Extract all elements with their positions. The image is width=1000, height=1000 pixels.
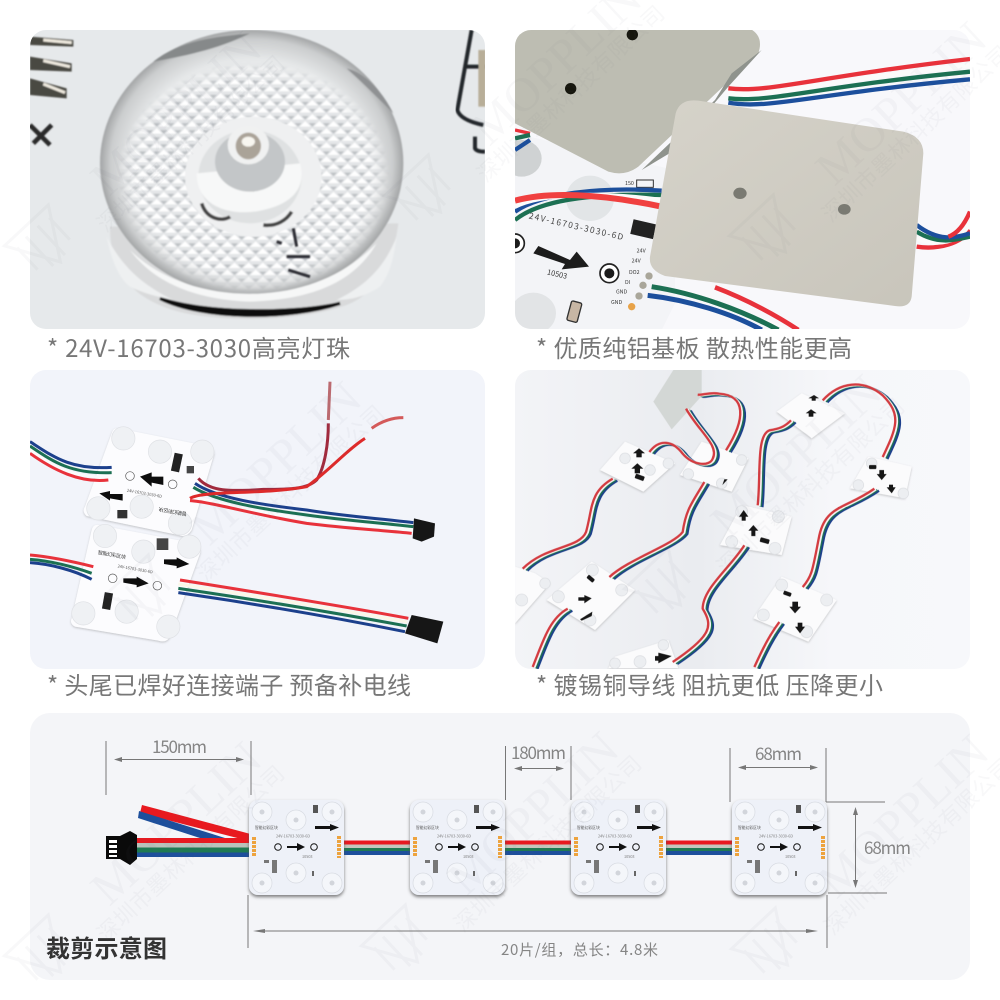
circuit board under the plates: DO2 xyxy=(629,268,640,276)
rear wires xyxy=(515,59,970,248)
circuit board under the plates: DI xyxy=(625,278,631,286)
module 1 xyxy=(249,800,344,895)
module 4: 智能幻彩区块 xyxy=(738,825,761,831)
tri-colour wires xyxy=(523,385,900,669)
lens body xyxy=(99,30,404,319)
module 4 xyxy=(732,800,827,895)
watermark: repeating brand mark: 深圳市墨林科技有限公司 xyxy=(189,397,391,588)
dimension: 68mm width xyxy=(730,740,826,802)
circuit board under the plates: 24V-16703-3030-6D xyxy=(528,210,625,243)
panel: LED lens close-up photo xyxy=(30,30,486,330)
wires: lower left lead xyxy=(30,555,93,579)
wire: segment 1-2 xyxy=(340,840,417,855)
module: lower board: 24V-16703-3030-6D xyxy=(117,563,153,576)
dimension: 150mm: 150mm xyxy=(152,733,207,758)
circuit board under the plates: 10503 xyxy=(546,267,568,282)
watermark: repeating brand mark: MOPPLIN xyxy=(808,725,999,908)
module: upper board: 24V-16703-3030-6D xyxy=(126,488,163,500)
dimension: 180mm xyxy=(506,739,571,800)
module details xyxy=(516,453,909,669)
module 2: 24V-16703-3030-6D xyxy=(437,834,471,840)
module: upper board: 智能幻彩区块 xyxy=(158,506,187,517)
wires: upper left lead xyxy=(30,442,112,481)
module 1: 24V-16703-3030-6D xyxy=(276,834,310,840)
watermark: repeating brand mark: MOPPLIN xyxy=(181,372,372,555)
back plate xyxy=(653,370,702,429)
dimension: 150mm xyxy=(106,733,251,795)
watermark: repeating brand mark: 深圳市墨林科技有限公司 xyxy=(446,747,648,938)
module 2 xyxy=(410,800,505,895)
circuit board under the plates: GND xyxy=(611,298,623,306)
front wires xyxy=(648,287,798,330)
circuit board under the plates xyxy=(515,140,656,329)
icon: black connector xyxy=(106,831,137,865)
icon: connector lower xyxy=(405,615,443,643)
module 4: 24V-16703-3030-6D xyxy=(759,834,793,840)
icon: central LED dome xyxy=(185,117,322,277)
module 1: 10503 xyxy=(302,855,313,860)
module 3: 智能幻彩区块 xyxy=(577,825,600,831)
wire: segment 2-3 xyxy=(500,840,578,855)
panel: cutting diagram xyxy=(30,713,970,980)
heading: cutting diagram: 裁剪示意图 xyxy=(46,929,167,964)
watermark: repeating brand mark: MOPPLIN xyxy=(81,22,272,205)
module: upper board xyxy=(84,427,214,536)
icon: header pins at the left edge xyxy=(30,37,73,145)
watermark: repeating brand mark: 深圳市墨林科技有限公司 xyxy=(89,757,291,948)
module 2: 智能幻彩区块 xyxy=(416,825,439,831)
watermark: repeating brand mark: 深圳市墨林科技有限公司 xyxy=(709,390,911,581)
module: lower board: 智能幻彩区块 xyxy=(97,549,126,561)
wire branch: power leads xyxy=(138,805,258,842)
panel: soldered connector terminals photo xyxy=(30,370,485,669)
circuit board under the plates: 24V xyxy=(637,247,647,255)
module 3 xyxy=(571,800,666,895)
module 2: 10503 xyxy=(463,855,474,860)
module 3: 10503 xyxy=(624,855,635,860)
watermark: repeating brand mark: 深圳市墨林科技有限公司 xyxy=(89,47,291,238)
watermark: repeating brand mark: 深圳市墨林科技有限公司 xyxy=(469,0,671,188)
module: lower board xyxy=(71,524,201,641)
front aluminium plate xyxy=(650,100,923,306)
circuit board under the plates: GND xyxy=(616,287,628,295)
watermark: repeating brand mark: MOPPLIN xyxy=(806,12,997,195)
caption: terminals: * 头尾已焊好连接端子 预备补电线 xyxy=(47,666,411,701)
module arrows xyxy=(578,395,896,663)
icon: connector upper xyxy=(413,518,435,542)
circuit board under the plates: 24V xyxy=(632,257,642,265)
dimension: 180mm: 180mm xyxy=(511,739,566,764)
wires: lower right lead to connector xyxy=(178,580,408,632)
wire: connector lead xyxy=(137,838,253,857)
circuit board under the plates: 150 xyxy=(625,179,634,187)
dimension: 68mm width: 68mm xyxy=(755,740,802,765)
dimension: total length xyxy=(248,895,827,960)
module 3: 24V-16703-3030-6D xyxy=(598,834,632,840)
module 4: 10503 xyxy=(785,855,796,860)
rear aluminium plate xyxy=(515,27,762,173)
caption: aluminium substrate: * 优质纯铝基板 散热性能更高 xyxy=(536,329,852,364)
wires: upper right lead to connector xyxy=(190,382,413,533)
caption: copper wire: * 镀锡铜导线 阻抗更低 压降更小 xyxy=(536,666,883,701)
panel: aluminium substrate photo xyxy=(502,27,970,334)
modules xyxy=(515,393,912,668)
dimension: 68mm height: 68mm xyxy=(864,834,911,859)
wire: segment 3-4 xyxy=(661,840,739,855)
dimension: total length: 20片/组，总长：4.8米 xyxy=(501,939,658,960)
module 1: 智能幻彩区块 xyxy=(255,825,278,831)
dimension: 68mm height xyxy=(826,802,911,893)
watermark: repeating brand mark: MOPPLIN xyxy=(438,722,629,905)
icon: black outline marking at the right edge xyxy=(457,30,485,152)
caption: LED bead: * 24V-16703-3030高亮灯珠 xyxy=(47,329,350,364)
panel: tinned copper wire photo xyxy=(515,370,970,669)
watermark: repeating brand mark: MOPPLIN xyxy=(701,365,892,548)
watermark: repeating brand mark: MOPPLIN xyxy=(81,732,272,915)
